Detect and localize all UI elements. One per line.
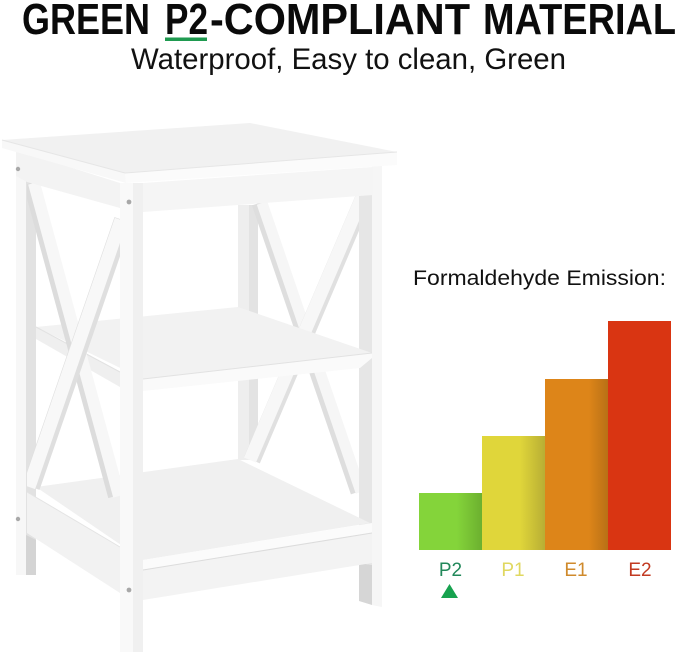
back leg	[238, 205, 258, 460]
right side X brace	[250, 195, 365, 492]
left side X brace	[29, 183, 123, 496]
chart heading: Formaldehyde Emission:	[413, 266, 666, 290]
bar P1	[482, 436, 545, 550]
table top	[2, 123, 397, 183]
bottom shelf	[27, 459, 372, 600]
title underline: P2	[165, 38, 207, 41]
middle shelf	[36, 307, 372, 391]
label P2: P2	[439, 560, 462, 581]
right post	[359, 165, 382, 607]
bar E2	[608, 321, 671, 550]
label E1: E1	[564, 560, 588, 581]
front post	[120, 183, 143, 652]
label P1: P1	[501, 560, 525, 581]
subtitle: Waterproof, Easy to clean, Green	[131, 43, 566, 76]
side table illustration	[2, 123, 397, 652]
label E2: E2	[628, 560, 652, 581]
bar chart	[419, 321, 671, 598]
marker triangle	[441, 584, 458, 598]
table top apron	[16, 150, 373, 212]
bar P2	[419, 493, 482, 550]
title	[22, 0, 676, 44]
screws	[16, 167, 131, 592]
rear left post	[16, 155, 36, 575]
bar E1	[545, 379, 608, 550]
